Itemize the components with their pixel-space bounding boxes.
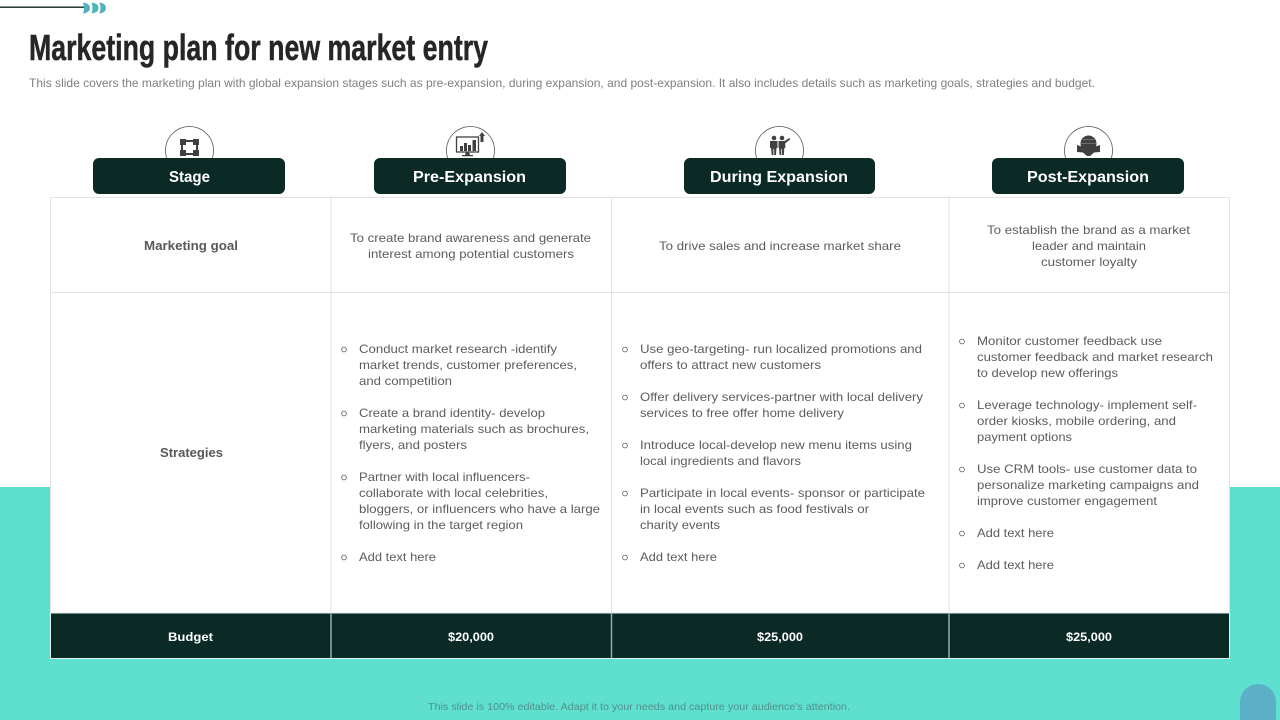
strategies: during expansion: charity events	[640, 518, 720, 532]
strategies: during expansion: Use geo-targeting- run localized promotions and	[640, 342, 922, 356]
budget: pre-expansion: $20,000	[448, 630, 494, 644]
icon: two people pointing	[756, 126, 804, 174]
budget: during expansion: $25,000	[757, 630, 803, 644]
budget label: Budget	[168, 630, 213, 644]
goal: post-expansion: To establish the brand as a market	[987, 223, 1191, 237]
strategies: during expansion: in local events such as food festivals or	[640, 502, 869, 516]
strategies: pre-expansion: following in the target region	[359, 518, 523, 532]
header: Stage	[93, 158, 285, 194]
subtitle: This slide covers the marketing plan with global expansion stages such as pre-expansion, during expansion, and post-expansion. It also includes details such as marketing goals, strategies and budget.	[29, 76, 1095, 90]
goal: pre-expansion: To create brand awareness and generate	[350, 231, 591, 245]
icon: chart monitor	[446, 126, 494, 174]
strategies: post-expansion: customer feedback and market research	[977, 350, 1213, 364]
strategies: during expansion: Introduce local-develop new menu items using	[640, 438, 912, 452]
strategies: pre-expansion: market trends, customer preferences,	[359, 358, 577, 372]
footer note: This slide is 100% editable. Adapt it to your needs and capture your audience's attention.	[428, 701, 850, 713]
strategies: pre-expansion: Create a brand identity- develop	[359, 406, 545, 420]
icon: globe handshake	[1064, 126, 1112, 174]
strategies: pre-expansion: Partner with local influencers-	[359, 470, 530, 484]
strategies: pre-expansion	[342, 342, 600, 564]
strategies: pre-expansion: Conduct market research -identify	[359, 342, 557, 356]
strategies: post-expansion: Add text here	[977, 526, 1054, 540]
strategies: during expansion: Add text here	[640, 550, 717, 564]
header: Post-Expansion	[992, 158, 1184, 194]
row label: Strategies: Strategies	[160, 446, 223, 460]
teal background band	[0, 487, 1280, 720]
strategies: during expansion	[623, 342, 925, 564]
icon: stage nodes	[166, 126, 214, 174]
header: Stage: Stage	[169, 169, 210, 186]
header: During Expansion	[684, 158, 875, 194]
strategies: post-expansion: Use CRM tools- use customer data to	[977, 462, 1197, 476]
goal: post-expansion	[987, 223, 1191, 269]
budget: post-expansion: $25,000	[1066, 630, 1112, 644]
header: Pre-Expansion	[374, 158, 566, 194]
table body	[50, 198, 1230, 614]
header: Post-Expansion: Post-Expansion	[1027, 169, 1149, 186]
strategies: post-expansion: Add text here	[977, 558, 1054, 572]
goal: pre-expansion: interest among potential customers	[368, 247, 574, 261]
strategies: post-expansion: Leverage technology- implement self-	[977, 398, 1197, 412]
strategies: pre-expansion: marketing materials such as brochures,	[359, 422, 589, 436]
strategies: pre-expansion: bloggers, or influencers who have a large	[359, 502, 600, 516]
strategies: post-expansion: Monitor customer feedback use	[977, 334, 1162, 348]
strategies: post-expansion: payment options	[977, 430, 1072, 444]
top accent line with arrows	[0, 2, 106, 14]
strategies: post-expansion: to develop new offerings	[977, 366, 1118, 380]
strategies: pre-expansion: Add text here	[359, 550, 436, 564]
goal: post-expansion: customer loyalty	[1041, 255, 1137, 269]
strategies: post-expansion: improve customer engagement	[977, 494, 1158, 508]
strategies: during expansion: offers to attract new customers	[640, 358, 821, 372]
strategies: pre-expansion: flyers, and posters	[359, 438, 467, 452]
strategies: during expansion: local ingredients and flavors	[640, 454, 801, 468]
strategies: during expansion: Offer delivery services-partner with local delivery	[640, 390, 923, 404]
strategies: during expansion: Participate in local events- sponsor or participate	[640, 486, 925, 500]
strategies: during expansion: services to free offer home delivery	[640, 406, 844, 420]
decorative blue tab	[1240, 684, 1276, 720]
header: During Expansion: During Expansion	[710, 169, 848, 186]
header: Pre-Expansion: Pre-Expansion	[413, 169, 526, 186]
strategies: pre-expansion: collaborate with local celebrities,	[359, 486, 548, 500]
strategies: post-expansion: order kiosks, mobile ordering, and	[977, 414, 1176, 428]
strategies: post-expansion: personalize marketing campaigns and	[977, 478, 1199, 492]
row label: Marketing goal: Marketing goal	[144, 239, 238, 253]
strategies: post-expansion	[960, 334, 1213, 572]
strategies: pre-expansion: and competition	[359, 374, 452, 388]
goal: during expansion: To drive sales and increase market share	[659, 239, 901, 253]
goal: post-expansion: leader and maintain	[1032, 239, 1146, 253]
goal: pre-expansion	[350, 231, 591, 261]
budget row background	[50, 613, 1230, 658]
title: Marketing plan for new market entry	[29, 27, 488, 68]
